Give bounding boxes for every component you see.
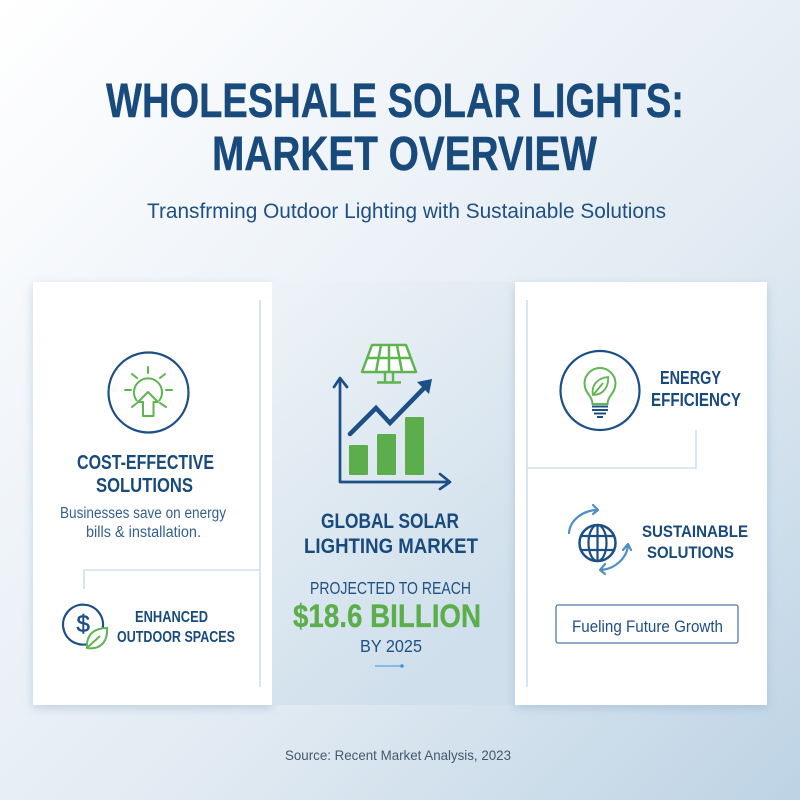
heading: cost-effective solutions: COST-EFFECTIVE — [77, 452, 214, 474]
text: businesses save: Businesses save on energy — [60, 505, 226, 522]
heading: global solar lighting market: LIGHTING MARKET — [304, 535, 478, 558]
heading: enhanced outdoor spaces — [117, 609, 235, 646]
heading: energy efficiency: ENERGY — [660, 368, 721, 388]
stat: 18.6 billion: $18.6 BILLION — [293, 598, 481, 634]
title — [106, 75, 684, 181]
heading: enhanced outdoor spaces: ENHANCED — [135, 609, 208, 626]
heading: sustainable solutions: SOLUTIONS — [647, 543, 734, 562]
heading: energy efficiency: EFFICIENCY — [651, 390, 741, 410]
icon: bulb with leaf — [560, 351, 640, 430]
callout: fueling future growth: Fueling Future Growth — [572, 618, 723, 636]
panel: global market — [272, 282, 515, 705]
chart: growth bars and arrow — [334, 378, 450, 489]
heading: sustainable solutions — [642, 522, 748, 562]
heading: cost-effective solutions — [77, 452, 214, 497]
heading: cost-effective solutions: SOLUTIONS — [96, 475, 193, 497]
callout: fueling future growth — [556, 605, 738, 643]
heading: energy efficiency — [651, 368, 741, 410]
panel: cost and outdoor spaces — [33, 282, 272, 705]
icon: dollar with leaf — [63, 605, 107, 648]
source note: Source: Recent Market Analysis, 2023 — [285, 747, 511, 763]
heading: global solar lighting market — [304, 510, 478, 558]
icon: sun with up arrow — [108, 352, 188, 432]
text: businesses save: bills & installation. — [86, 524, 201, 541]
heading: enhanced outdoor spaces: OUTDOOR SPACES — [117, 629, 235, 646]
text: projected to reach: PROJECTED TO REACH — [310, 578, 471, 598]
heading: global solar lighting market: GLOBAL SOLAR — [321, 510, 459, 533]
icon: dollar with leaf: $ — [76, 611, 90, 638]
accent line with dot — [375, 664, 404, 668]
icon: globe with arrows — [569, 505, 631, 574]
text: businesses save — [60, 505, 226, 541]
heading: sustainable solutions: SUSTAINABLE — [642, 522, 748, 541]
subtitle: Transfrming Outdoor Lighting with Sustainable Solutions — [147, 199, 666, 223]
icon: solar panel — [362, 345, 416, 382]
title: MARKET OVERVIEW — [212, 128, 598, 181]
text: by 2025: BY 2025 — [360, 636, 422, 656]
panel: efficiency and sustainability — [515, 282, 767, 705]
